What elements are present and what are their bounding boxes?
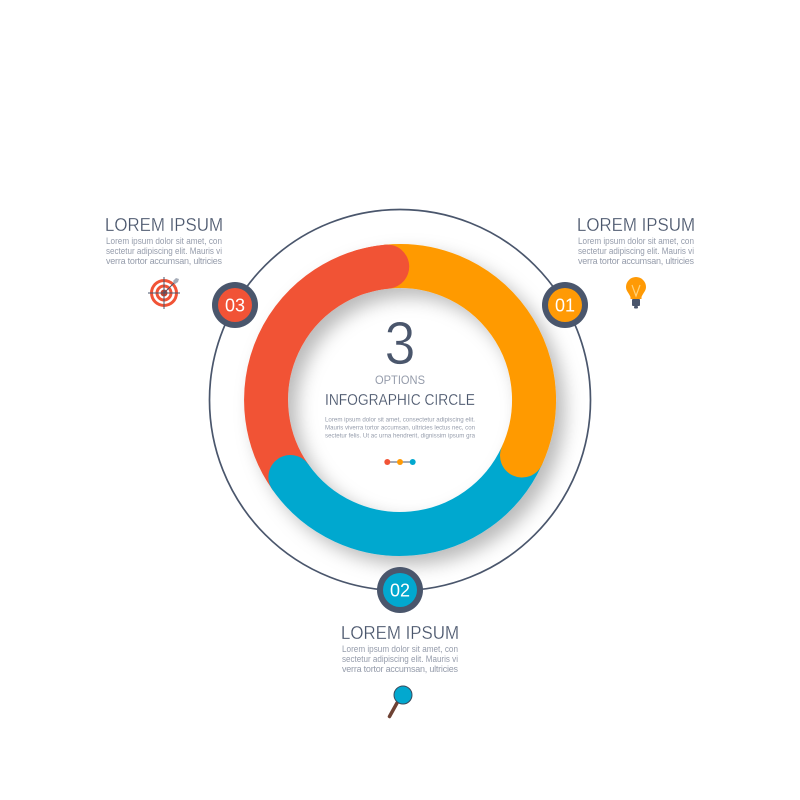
infographic circle heading: INFOGRAPHIC CIRCLE [325,392,475,409]
badge 02: 02 [390,580,410,600]
text block: option 01: verra tortor accumsan, ultricies [578,256,694,266]
text block: option 01: Lorem ipsum dolor sit amet, con [578,236,694,246]
text block: option 03: sectetur adipiscing elit. Mauris vi [106,246,222,256]
badge 03: 03 [225,296,245,316]
text block: option 03: verra tortor accumsan, ultricies [106,256,222,266]
text block: option 01: LOREM IPSUM [577,215,695,235]
badge 03 [212,282,258,328]
text block: option 03 [105,215,223,266]
text block: option 02: verra tortor accumsan, ultricies [342,664,458,674]
segment: blue [290,456,522,534]
text block: option 03: LOREM IPSUM [105,215,223,235]
text block: option 01: sectetur adipiscing elit. Mauris vi [578,246,694,256]
three connected dots [384,459,416,465]
icon: light bulb [626,277,646,308]
badge 01 [542,282,588,328]
segment: red rounded tip [362,267,387,272]
centre body text: sectetur felis. Ut ac urna hendrerit, dignissim ipsum gra [325,432,475,440]
text block: option 02: LOREM IPSUM [341,623,459,643]
text block: option 02: sectetur adipiscing elit. Mauris vi [342,654,458,664]
text block: option 03: Lorem ipsum dolor sit amet, con [106,236,222,246]
centre body text [325,416,475,440]
badge 01: 01 [555,296,575,316]
badge 02 [377,567,423,613]
segment: red [266,267,387,477]
outer thin circle [210,210,590,590]
text block: option 02: Lorem ipsum dolor sit amet, con [342,644,458,654]
icon: magnifier [390,686,412,716]
icon: target [148,277,180,309]
centre body text: Lorem ipsum dolor sit amet, consectetur adipiscing elit. [325,416,475,424]
text block: option 02 [341,623,459,674]
big number 3: 3 [384,310,416,377]
segment: orange [387,266,534,456]
centre body text: Mauris viverra tortor accumsan, ultricies lectus nec, con [325,424,475,432]
options label: OPTIONS [375,375,425,387]
centre text block [325,310,475,440]
donut ring with three segments [266,266,534,534]
text block: option 01 [577,215,695,266]
